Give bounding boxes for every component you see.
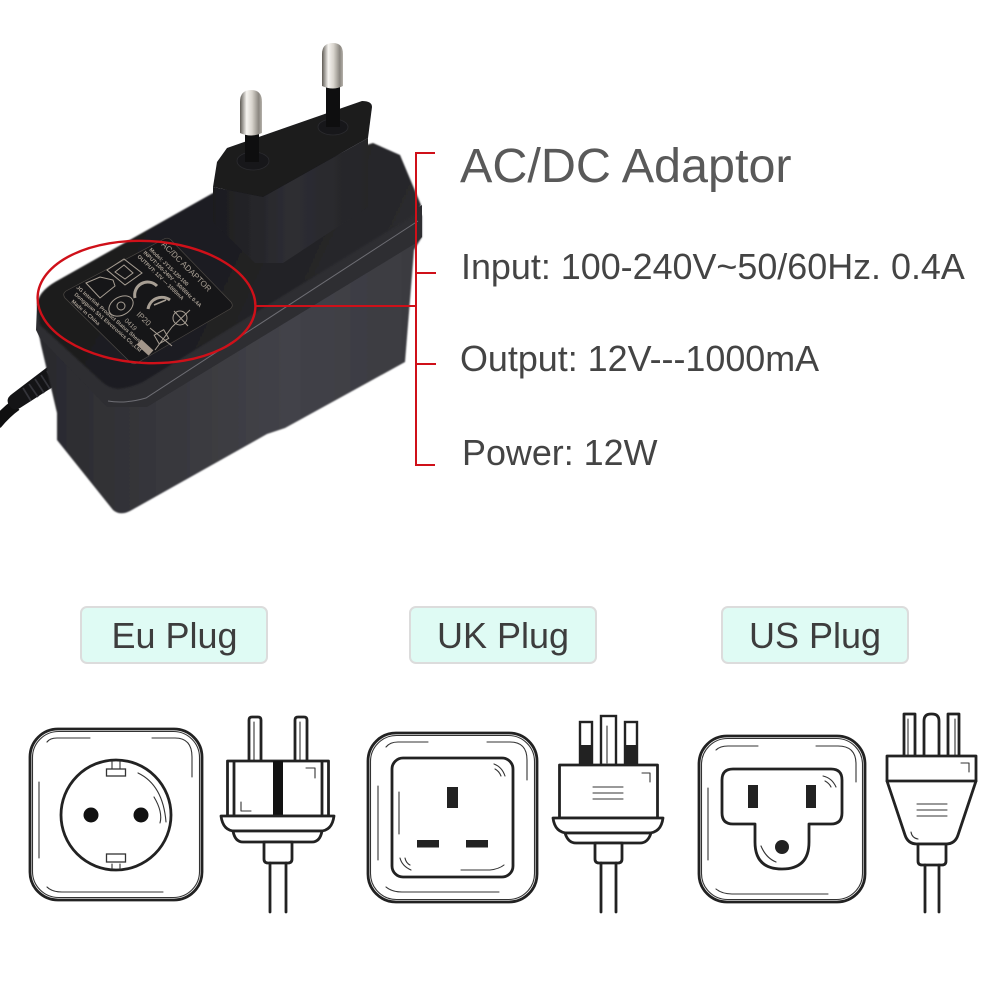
label spec text: JG Interlink Product Status Shenzhen bbox=[75, 285, 150, 352]
label heading text: AC/DC ADAPTOR bbox=[160, 240, 213, 294]
label: UK Plug bbox=[410, 607, 596, 663]
label IP20 mark: IP20 bbox=[135, 310, 153, 328]
icon: EU plug bbox=[221, 717, 334, 912]
label spec text bbox=[70, 247, 202, 354]
icon: US socket bbox=[699, 736, 865, 902]
label spec text: Dongguan Sh1 Electronics Co.,Ltd bbox=[73, 292, 142, 354]
adapter lid lip bbox=[36, 205, 422, 407]
callout ellipse bbox=[34, 235, 259, 369]
label spec text: OUTPUT: 12V --- 1000mA bbox=[136, 254, 185, 302]
label: Eu Plug: Eu Plug bbox=[111, 615, 238, 656]
right pin bbox=[318, 43, 348, 135]
icon: US plug bbox=[887, 714, 976, 912]
adapter body front bbox=[38, 215, 422, 513]
lid edge highlight bbox=[108, 221, 418, 402]
rating label bbox=[64, 238, 232, 364]
left pin bbox=[237, 90, 269, 170]
label: US Plug bbox=[722, 607, 908, 663]
label: UK Plug: UK Plug bbox=[437, 615, 569, 656]
icon: UK plug bbox=[553, 716, 663, 912]
label spec text: Model: JY15-120-100 bbox=[148, 247, 189, 288]
label: US Plug: US Plug bbox=[749, 615, 881, 656]
icon: EU socket bbox=[30, 729, 202, 900]
icon: UK socket bbox=[368, 733, 537, 902]
label marks bbox=[86, 259, 190, 353]
callout bracket bbox=[256, 153, 436, 465]
heading: AC/DC Adaptor bbox=[460, 139, 792, 193]
power cable bbox=[0, 359, 70, 424]
label spec text: INPUT:100-240V ~ 50/60Hz 0.4A bbox=[142, 250, 202, 309]
spec: input: Input: 100-240V~50/60Hz. 0.4A bbox=[461, 247, 965, 287]
label spec text: Made in China bbox=[70, 299, 101, 327]
adapter body lid bbox=[37, 143, 421, 389]
label date code: 0419 bbox=[123, 317, 138, 333]
adapter photo illustration bbox=[0, 43, 422, 513]
label: Eu Plug bbox=[81, 607, 267, 663]
spec: power: Power: 12W bbox=[462, 433, 658, 473]
wall plug housing bbox=[213, 101, 372, 263]
spec: output: Output: 12V---1000mA bbox=[460, 339, 819, 379]
